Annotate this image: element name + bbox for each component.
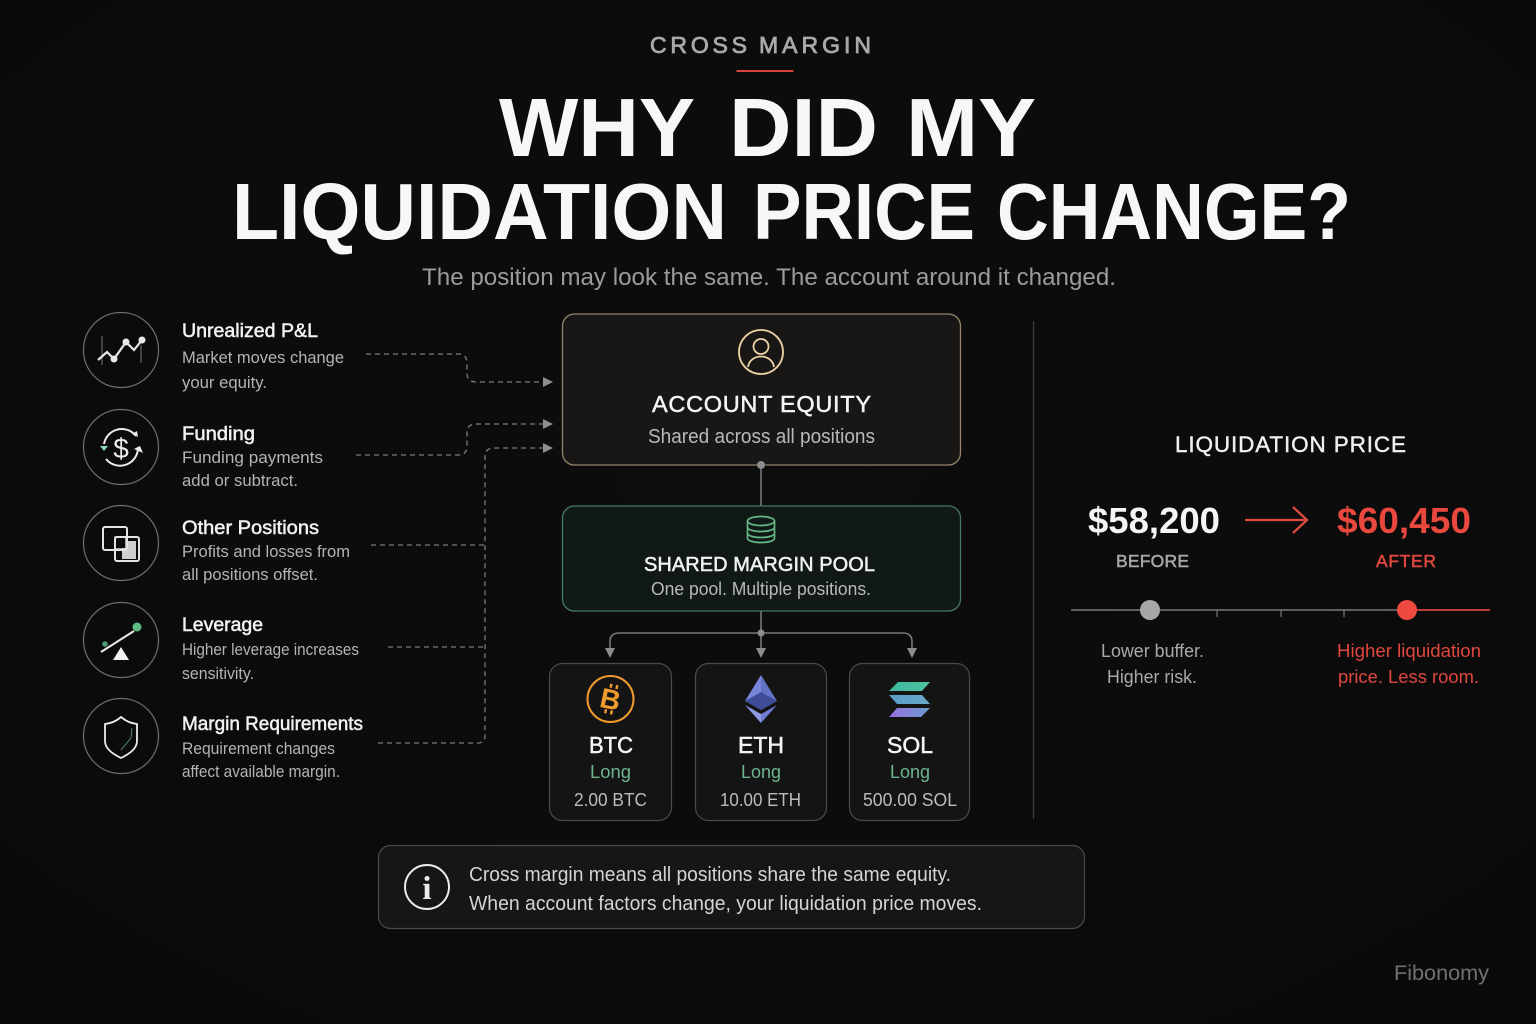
text: leverage: sensitivity. <box>182 664 254 683</box>
text: leverage <box>182 615 359 683</box>
icon: bitcoin: B <box>597 682 624 717</box>
icon: user <box>739 330 783 374</box>
text: BTC: 2.00 BTC <box>574 790 647 810</box>
connector: pool to assets <box>605 611 917 658</box>
icon: database <box>748 516 774 542</box>
text: funding <box>182 424 323 490</box>
card: SOL <box>850 664 970 820</box>
factor: leverage <box>84 602 359 683</box>
icon: seesaw <box>84 602 158 678</box>
text: BTC <box>574 732 647 810</box>
text: before note <box>1101 641 1204 687</box>
text: ETH: 10.00 ETH <box>720 790 801 810</box>
text: funding: add or subtract. <box>182 471 298 490</box>
text: after note: price. Less room. <box>1338 667 1479 687</box>
title: PRICE <box>753 167 975 256</box>
text: margin requirements: Requirement changes <box>182 739 335 758</box>
text: before note: Higher risk. <box>1107 667 1197 687</box>
heading: account equity: ACCOUNT EQUITY <box>652 391 871 417</box>
text: ETH: ETH <box>738 732 784 758</box>
text: SOL <box>863 732 957 810</box>
factor: funding <box>84 410 323 490</box>
panel: account equity <box>562 314 960 465</box>
value: before <box>1088 500 1220 571</box>
text: BTC: BTC <box>589 732 633 758</box>
heading: shared margin pool: SHARED MARGIN POOL <box>644 554 875 576</box>
text: summary: Cross margin means all positions share the same equity. <box>469 864 951 886</box>
eyebrow: cross margin: CROSS <box>650 32 747 58</box>
text: unrealized P&L: Market moves change <box>182 348 344 367</box>
text: BTC: Long <box>590 762 631 782</box>
divider <box>1032 321 1034 819</box>
text: funding: Funding <box>182 424 255 445</box>
scale: price track <box>1071 600 1490 620</box>
card: ETH <box>696 664 826 820</box>
text: summary: When account factors change, your liquidation price moves. <box>469 893 982 915</box>
callout: cross margin summary <box>378 846 1084 928</box>
text: summary <box>469 864 982 915</box>
title: LIQUIDATION <box>232 167 727 256</box>
icon: info: i <box>422 871 432 907</box>
value: before: $58,200 <box>1088 500 1220 541</box>
text: leverage: Higher leverage increases <box>182 640 359 659</box>
text: other positions: all positions offset. <box>182 565 318 584</box>
icon: solana <box>889 682 930 717</box>
icon: line chart <box>84 312 158 388</box>
connector: equity to pool <box>757 461 765 506</box>
text: margin requirements: affect available margin. <box>182 762 340 781</box>
icon: bitcoin <box>588 676 634 722</box>
text: margin requirements <box>182 714 363 781</box>
subtitle: The position may look the same. The account around it changed. <box>422 264 1116 291</box>
text: other positions: Other Positions <box>182 518 319 539</box>
text: unrealized P&L: your equity. <box>182 373 267 392</box>
icon: dollar cycle: $ <box>113 433 129 464</box>
panel: shared margin pool <box>562 506 960 611</box>
text: funding: Funding payments <box>182 448 323 467</box>
text: before note: Lower buffer. <box>1101 641 1204 661</box>
text: ETH: Long <box>741 762 781 782</box>
text: SOL: Long <box>890 762 930 782</box>
value: after: AFTER <box>1376 551 1436 571</box>
text: unrealized P&L: Unrealized P&L <box>182 321 318 342</box>
factor: margin requirements <box>84 698 363 781</box>
icon: info <box>405 865 449 909</box>
icon: dollar cycle <box>84 410 158 484</box>
factor: other positions <box>84 506 350 584</box>
arrow: before to after <box>1245 507 1307 533</box>
eyebrow: cross margin <box>650 32 871 72</box>
text: after note <box>1337 641 1481 687</box>
text: unrealized P&L <box>182 321 344 392</box>
factor: unrealized P&L <box>84 312 344 392</box>
title: MY <box>906 81 1036 174</box>
text: shared across: Shared across all positions <box>648 426 875 448</box>
text: leverage: Leverage <box>182 615 263 636</box>
text: one pool: One pool. Multiple positions. <box>651 579 871 599</box>
value: before: BEFORE <box>1116 551 1189 571</box>
icon: ethereum <box>745 675 777 723</box>
panel: account factors <box>84 312 363 781</box>
icon: shield <box>84 698 158 774</box>
text: after note: Higher liquidation <box>1337 641 1481 661</box>
title: DID <box>729 81 878 174</box>
text: other positions <box>182 518 350 584</box>
dashed connectors into account equity <box>356 354 553 743</box>
eyebrow: cross margin: MARGIN <box>759 32 871 58</box>
title: CHANGE? <box>997 167 1351 256</box>
text: SOL: SOL <box>887 732 933 758</box>
text: other positions: Profits and losses from <box>182 542 350 561</box>
heading: liquidation price: LIQUIDATION PRICE <box>1175 432 1406 457</box>
value: after: $60,450 <box>1337 500 1471 541</box>
card: BTC <box>550 664 672 820</box>
panel: liquidation price <box>1071 432 1490 687</box>
text: SOL: 500.00 SOL <box>863 790 957 810</box>
text: margin requirements: Margin Requirements <box>182 714 363 735</box>
icon: overlapping squares <box>84 506 158 580</box>
title <box>232 81 1351 256</box>
text: ETH <box>720 732 801 810</box>
brand: Fibonomy: Fibonomy <box>1394 962 1490 985</box>
value: after <box>1337 500 1471 571</box>
title: WHY <box>499 81 695 174</box>
